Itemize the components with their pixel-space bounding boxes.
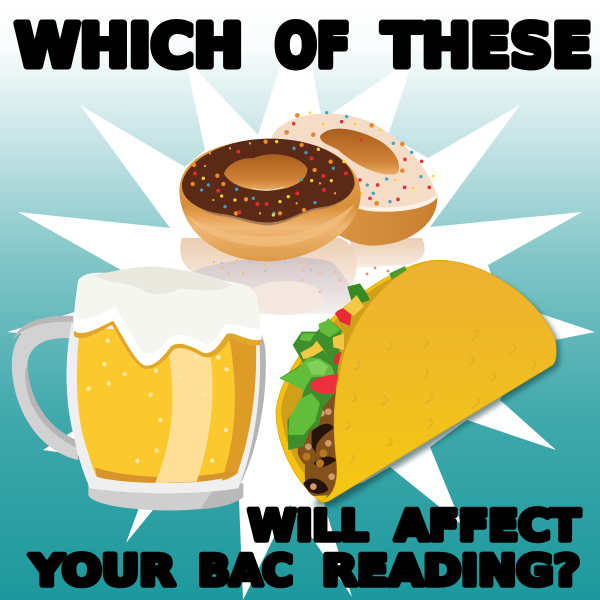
beer dark side	[222, 333, 256, 481]
front donut hole	[224, 154, 307, 191]
title: which of these: WHICH	[15, 11, 243, 80]
donut reflection	[180, 238, 425, 315]
subtitle line one: AFFECT	[395, 501, 580, 550]
front donut with chocolate icing	[179, 139, 361, 261]
cheese	[301, 295, 364, 359]
back donut with pink icing	[272, 113, 437, 246]
lettuce	[279, 318, 342, 450]
subtitle line one	[248, 501, 580, 550]
taco	[276, 260, 560, 507]
title: which of these	[15, 11, 592, 80]
pink icing sprinkles	[287, 115, 402, 203]
subtitle line two: BAC	[198, 546, 293, 595]
inner shell shade	[281, 269, 412, 493]
title: which of these: THESE	[382, 11, 592, 80]
subtitle line two	[29, 546, 580, 595]
beer bottom band	[95, 467, 237, 483]
back donut hole	[320, 129, 399, 174]
taco shadow	[313, 265, 560, 507]
beer mug	[12, 266, 266, 510]
chocolate icing	[182, 139, 355, 223]
foam gold line	[74, 321, 262, 369]
pink icing	[272, 113, 437, 208]
subtitle line two: READING?	[322, 546, 580, 595]
front donut dough	[179, 139, 361, 261]
chocolate icing edge	[185, 183, 354, 225]
mug base	[88, 480, 243, 510]
chocolate icing sprinkles	[193, 142, 331, 213]
icing light edge	[272, 113, 437, 212]
foam body	[75, 266, 261, 354]
subtitle line one: WILL	[248, 501, 368, 550]
subtitle line two: YOUR	[29, 546, 175, 595]
mug handle	[12, 316, 78, 460]
beer bubbles	[89, 341, 227, 461]
foam top shade	[93, 266, 233, 294]
beer highlight	[155, 348, 212, 483]
front shell	[320, 260, 556, 502]
title: which of these: OF	[275, 11, 350, 80]
glass body	[67, 323, 266, 493]
meat filling	[298, 390, 347, 496]
shell texture marks	[345, 330, 535, 463]
foam white edge	[74, 266, 262, 366]
back shell	[276, 261, 430, 503]
beer	[77, 327, 256, 483]
tomato	[310, 374, 338, 394]
dough highlight	[187, 203, 355, 247]
back donut dough	[276, 120, 437, 246]
